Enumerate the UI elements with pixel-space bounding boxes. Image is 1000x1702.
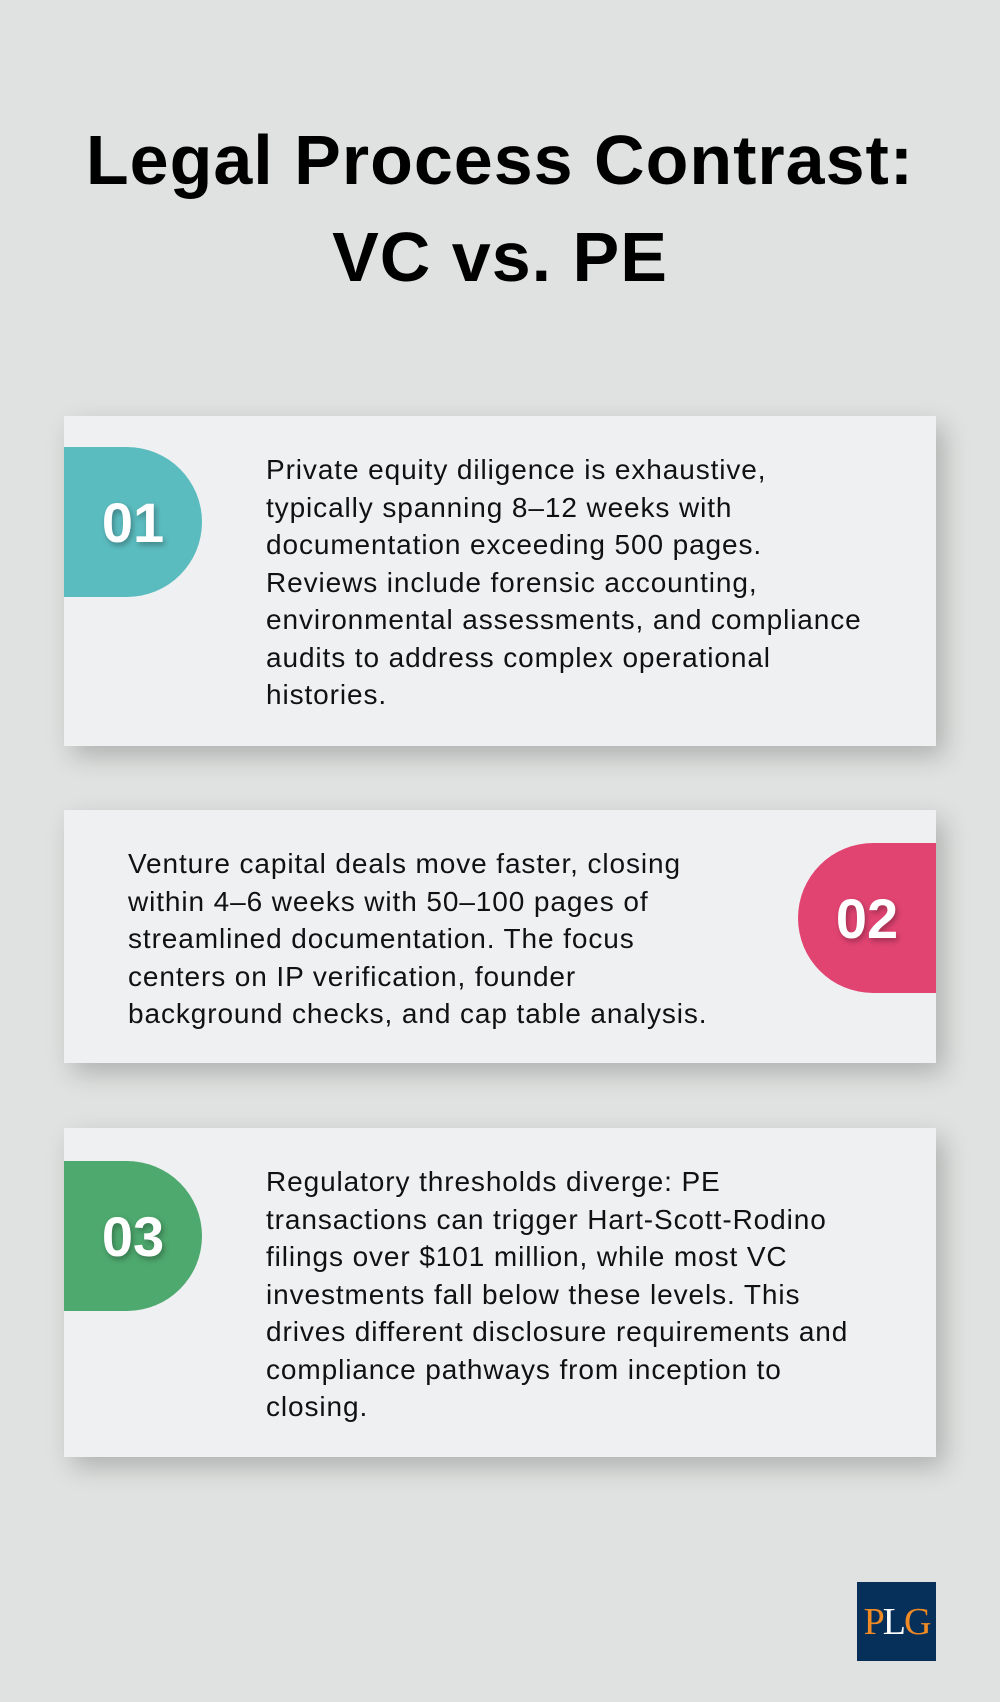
text 02: background checks, and cap table analysis.: [128, 998, 707, 1029]
text 01: documentation exceeding 500 pages.: [266, 529, 762, 560]
logo: PLG: G: [904, 1600, 929, 1642]
title: [86, 121, 914, 296]
text 03: closing.: [266, 1391, 368, 1422]
text 01: environmental assessments, and compliance: [266, 604, 862, 635]
text 02: Venture capital deals move faster, closing: [128, 848, 681, 879]
logo: PLG: P: [864, 1600, 883, 1642]
text 02: [128, 848, 707, 1029]
title: Legal Process Contrast:: [86, 121, 914, 199]
text 02: centers on IP verification, founder: [128, 960, 576, 992]
badge 02: [798, 843, 936, 993]
text 01: Private equity diligence is exhaustive,: [266, 454, 766, 485]
text 01: [266, 454, 862, 710]
panel: card 03: [64, 1128, 936, 1457]
text 01: histories.: [266, 679, 387, 710]
text 03: transactions can trigger Hart-Scott-Rodino: [266, 1204, 827, 1234]
badge 02: 02: [836, 886, 898, 950]
text 03: [266, 1166, 848, 1422]
badge 01: 01: [102, 490, 164, 554]
logo: PLG: L: [883, 1600, 904, 1642]
text 03: Regulatory thresholds diverge: PE: [266, 1166, 721, 1197]
badge 03: 03: [102, 1204, 164, 1268]
text 02: streamlined documentation. The focus: [128, 923, 635, 954]
text 03: compliance pathways from inception to: [266, 1354, 782, 1384]
text 03: investments fall below these levels. This: [266, 1278, 800, 1310]
panel: card 01: [64, 416, 936, 746]
text 03: drives different disclosure requirements and: [266, 1316, 848, 1347]
text 01: Reviews include forensic accounting,: [266, 566, 758, 598]
text 01: typically spanning 8–12 weeks with: [266, 492, 732, 522]
text 02: within 4–6 weeks with 50–100 pages of: [128, 886, 649, 916]
panel: card 02: [64, 810, 936, 1063]
badge 03: [64, 1161, 202, 1311]
badge 01: [64, 447, 202, 597]
text 01: audits to address complex operational: [266, 642, 771, 672]
title: VC vs. PE: [332, 218, 668, 296]
logo: PLG: [857, 1582, 936, 1661]
text 03: filings over $101 million, while most VC: [266, 1241, 788, 1272]
